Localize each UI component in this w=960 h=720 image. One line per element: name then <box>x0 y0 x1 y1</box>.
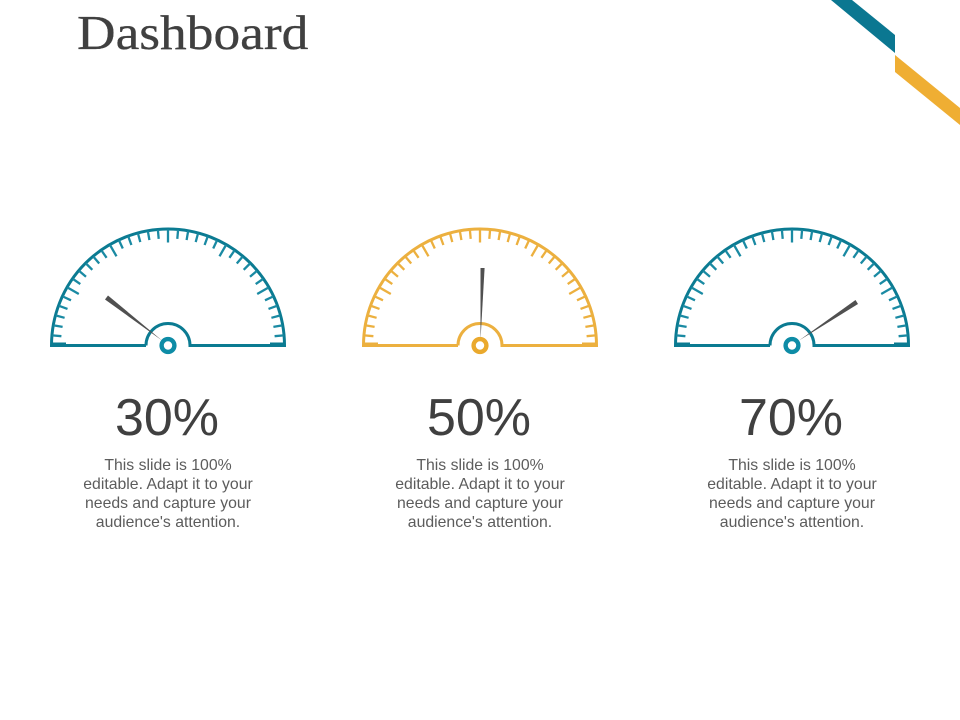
gauge 3 needle <box>799 300 858 340</box>
gauge 2 hub <box>474 339 486 352</box>
gauge 2 needle <box>480 268 485 340</box>
description 3: editable. Adapt it to your <box>707 476 877 493</box>
gauge 3 dial <box>676 229 908 346</box>
description 2: This slide is 100% <box>416 457 544 474</box>
gauge 1 needle <box>105 296 162 340</box>
description 1 <box>83 457 253 531</box>
description 2 <box>395 457 565 531</box>
description 3: needs and capture your <box>709 495 875 512</box>
value 70%: 70% <box>739 389 843 447</box>
description 3: audience's attention. <box>720 514 864 531</box>
description 3 <box>707 457 877 531</box>
gauge 1 hub <box>162 339 174 352</box>
corner ribbons <box>831 0 960 125</box>
description 1: audience's attention. <box>96 514 240 531</box>
description 1: needs and capture your <box>85 495 251 512</box>
title: Dashboard <box>77 5 308 60</box>
description 1: This slide is 100% <box>104 457 232 474</box>
gauge 1 dial <box>52 229 284 346</box>
description 2: editable. Adapt it to your <box>395 476 565 493</box>
value 50%: 50% <box>427 389 531 447</box>
description 2: audience's attention. <box>408 514 552 531</box>
description 1: editable. Adapt it to your <box>83 476 253 493</box>
gauge 3 hub <box>786 339 798 352</box>
description 3: This slide is 100% <box>728 457 856 474</box>
description 2: needs and capture your <box>397 495 563 512</box>
value 30%: 30% <box>115 389 219 447</box>
gauge 2 dial <box>364 229 596 346</box>
